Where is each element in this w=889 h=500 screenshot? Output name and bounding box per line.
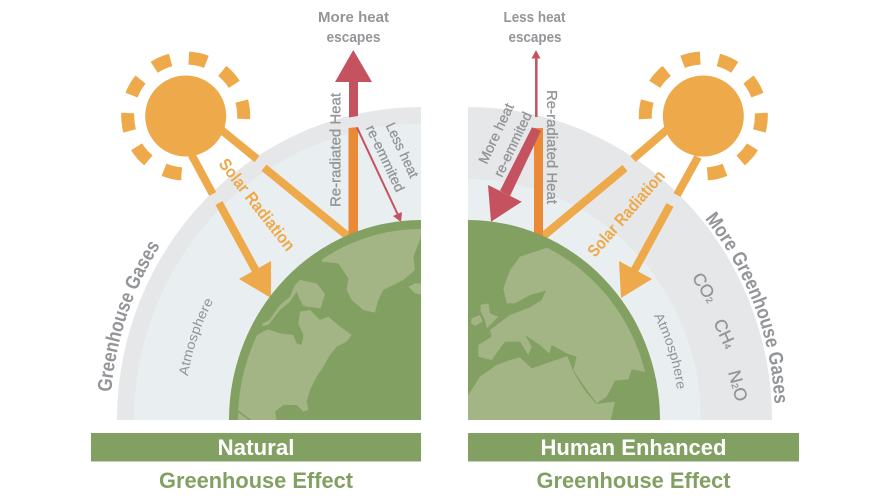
solar beam arrow (192, 155, 271, 298)
label: more heat: More heat (475, 101, 517, 166)
thin red arrow: less heat escapes (532, 50, 540, 117)
label: re-emmited: re-emmited (490, 109, 535, 179)
solar beam reflected (219, 128, 350, 238)
label: re-radiated heat: Re-radiated Heat (543, 90, 560, 205)
label: N2O: N2O (724, 368, 752, 403)
panel: natural greenhouse effect (98, 9, 422, 420)
greenhouse gas band (468, 107, 772, 420)
label: more heat escapes: More heat (318, 9, 389, 26)
label: re-emmited: re-emmited (363, 122, 408, 194)
orange re-radiated heat bar (348, 127, 358, 240)
label: more greenhouse gases: More Greenhouse Gases (706, 211, 786, 404)
solar beam reflected (541, 128, 669, 238)
label: more heat escapes: escapes (326, 29, 380, 46)
label: atmosphere: Atmosphere (180, 299, 212, 376)
label: less heat escapes: escapes (508, 29, 562, 46)
atmosphere layer (468, 179, 701, 420)
label: solar radiation: Solar Radiation (215, 155, 299, 255)
atmosphere layer (134, 124, 421, 420)
subtitle: greenhouse effect right: Greenhouse Effect (536, 468, 731, 493)
orange re-radiated heat bar (534, 128, 543, 238)
icon: sun (127, 57, 244, 175)
banner: natural: Natural (218, 435, 294, 460)
earth (223, 220, 423, 420)
earth (463, 220, 667, 423)
label: less heat escapes: Less heat (504, 9, 566, 26)
label: CH4: CH4 (709, 316, 740, 352)
red arrow: more heat re-emitted (488, 127, 541, 222)
label: solar radiation: Solar Radiation (584, 167, 669, 261)
banner: natural (91, 433, 421, 462)
solar beam arrow (619, 157, 698, 298)
greenhouse gas band (117, 107, 421, 420)
subtitle: greenhouse effect left: Greenhouse Effect (159, 468, 354, 493)
thin red arrow: less heat re-emitted (357, 128, 402, 222)
banner: human enhanced (468, 433, 799, 462)
label: greenhouse gases: Greenhouse Gases (98, 242, 159, 391)
label: re-radiated heat: Re-radiated Heat (328, 92, 344, 207)
label: atmosphere: Atmosphere (654, 315, 684, 388)
label: less heat: Less heat (383, 120, 422, 180)
panel: human enhanced greenhouse effect (468, 9, 786, 420)
banner: human enhanced: Human Enhanced (540, 435, 726, 460)
label: CO2: CO2 (688, 269, 722, 306)
red arrow: more heat escapes (335, 50, 372, 118)
icon: sun (645, 57, 762, 175)
